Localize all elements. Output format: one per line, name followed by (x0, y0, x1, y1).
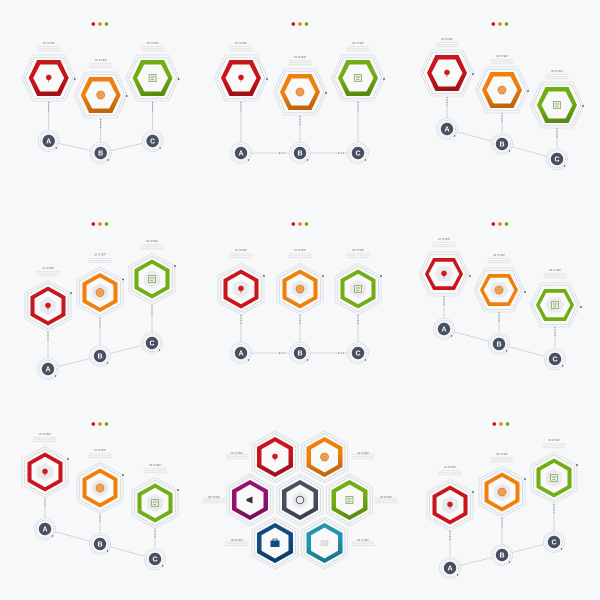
step 01: 01 STEP (235, 41, 247, 45)
node A: A (45, 366, 51, 374)
step 03 (531, 438, 578, 504)
connector dashes (241, 315, 358, 353)
status dots (92, 422, 108, 426)
step 03: 03 STEP (549, 268, 561, 272)
connectors (447, 97, 557, 159)
node C (544, 532, 564, 552)
node B: B (97, 354, 103, 360)
connectors (49, 102, 153, 153)
step 05 (252, 517, 298, 569)
node A (230, 342, 252, 364)
label 05: 05 STEP (231, 538, 243, 542)
step 06 (227, 474, 273, 526)
label 03: 03 STEP (380, 495, 392, 499)
panel: middle left (25, 222, 176, 380)
node A: A (238, 150, 244, 158)
node A (436, 118, 458, 140)
step 01 (252, 431, 298, 483)
label 03 (374, 495, 398, 503)
connectors (444, 296, 555, 359)
node B (488, 334, 510, 354)
step 03: 03 STEP (548, 438, 560, 442)
node C (544, 348, 566, 370)
node C: C (554, 156, 560, 164)
step 01: 01 STEP (39, 432, 51, 436)
label 06: 06 STEP (208, 495, 220, 499)
step 03 (126, 41, 180, 101)
connector dashes (45, 497, 155, 537)
step 01: 01 STEP (438, 237, 450, 241)
connectors (241, 315, 358, 353)
panel: middle centre (218, 222, 382, 364)
connector dashes (49, 102, 153, 128)
step 03 (326, 474, 372, 526)
status dots (492, 422, 509, 426)
node B: B (98, 150, 103, 158)
step 03: 03 STEP (551, 69, 563, 73)
step 02: 02 STEP (94, 252, 106, 256)
panel: bottom left (22, 422, 179, 570)
step 02 (302, 431, 348, 483)
node C: C (355, 350, 361, 358)
label 04: 04 STEP (357, 538, 369, 542)
step 02: 02 STEP (496, 452, 508, 456)
node C (546, 148, 568, 170)
node B: B (496, 342, 502, 348)
step 03 (132, 463, 179, 528)
status dots (92, 222, 108, 226)
step 02 (274, 55, 327, 115)
panel: top left (22, 22, 180, 164)
step 01 (22, 432, 69, 498)
step 03 (530, 69, 584, 128)
panel: middle right (419, 222, 582, 370)
step 02 (476, 54, 529, 113)
node B: B (297, 150, 303, 158)
step 02: 02 STEP (94, 448, 106, 452)
node B (290, 342, 310, 364)
node A: A (447, 566, 453, 572)
status dots (492, 222, 508, 226)
step 01: 01 STEP (444, 465, 456, 469)
step 03 (129, 239, 176, 304)
node C: C (551, 540, 557, 546)
step 04 (302, 517, 348, 569)
step 01 (218, 248, 265, 314)
node A (434, 318, 454, 340)
node B (492, 134, 512, 154)
node B (90, 142, 111, 164)
node C (142, 332, 162, 354)
step 01 (22, 41, 76, 101)
panel: bottom right (427, 422, 578, 578)
step 03: 03 STEP (352, 248, 364, 252)
node C (348, 142, 368, 164)
connector dashes (444, 296, 555, 336)
panel: top middle (214, 22, 385, 164)
step 03: 03 STEP (147, 41, 159, 45)
label 06 (202, 495, 226, 503)
step 02: 02 STEP (95, 58, 107, 62)
connector dashes (447, 97, 557, 137)
step 01 (420, 37, 474, 96)
step 02: 02 STEP (496, 54, 508, 58)
node B (492, 544, 512, 566)
node A: A (238, 350, 244, 358)
node C (144, 548, 166, 570)
step 01 (427, 465, 474, 530)
step 03 (530, 268, 582, 327)
step 02 (474, 253, 526, 312)
status dots (292, 222, 308, 226)
step 01: 01 STEP (441, 37, 453, 41)
connectors (241, 102, 358, 153)
node A: A (441, 326, 447, 334)
node B (90, 346, 110, 366)
step 01: 01 STEP (42, 266, 54, 270)
node C: C (149, 340, 155, 348)
node C: C (152, 556, 158, 564)
step 02: 02 STEP (493, 253, 505, 257)
step 03 (332, 41, 385, 101)
node C (348, 342, 368, 364)
connectors (45, 497, 155, 559)
step 03: 03 STEP (149, 463, 161, 467)
step 02: 02 STEP (294, 248, 306, 252)
panel: top right (420, 22, 584, 170)
status dots (292, 22, 308, 26)
step 01 (214, 41, 268, 101)
step 03: 03 STEP (146, 239, 158, 243)
node A: A (42, 526, 48, 534)
label 01: 01 STEP (231, 451, 243, 455)
panel: honeycomb (202, 431, 398, 569)
connector dashes (48, 305, 152, 341)
node B: B (297, 350, 303, 358)
node A (38, 130, 59, 152)
step 01 (25, 266, 72, 332)
node B (90, 534, 110, 554)
step 01: 01 STEP (43, 41, 55, 45)
step 02 (77, 448, 124, 514)
step 02 (77, 252, 124, 318)
node C: C (150, 138, 155, 146)
step 02 (277, 248, 324, 314)
centre hexagon (277, 474, 323, 526)
node A (230, 142, 252, 164)
step 01 (419, 237, 471, 296)
step 02 (74, 58, 128, 118)
step 01: 01 STEP (235, 248, 247, 252)
label 02 (352, 451, 374, 459)
step 03: 03 STEP (352, 41, 364, 45)
step 03 (335, 248, 382, 314)
node A (34, 518, 56, 540)
node B: B (499, 142, 505, 148)
step 02: 02 STEP (294, 55, 306, 59)
status dots (492, 22, 508, 26)
status dots (92, 22, 108, 26)
node A (38, 358, 58, 380)
connector dashes (450, 504, 554, 540)
node C (142, 130, 163, 152)
label 05 (226, 538, 248, 546)
connectors (48, 305, 152, 369)
label 01 (226, 451, 248, 459)
node C: C (552, 356, 558, 364)
connector dashes (241, 102, 358, 153)
node A: A (444, 126, 450, 134)
node C: C (355, 150, 361, 158)
label 02: 02 STEP (357, 451, 369, 455)
step 02 (479, 452, 526, 518)
node B: B (97, 542, 103, 548)
connectors (450, 504, 554, 568)
label 04 (352, 538, 374, 546)
node A (440, 558, 460, 578)
node A: A (46, 138, 51, 146)
node B (290, 142, 310, 164)
node B: B (499, 552, 505, 560)
